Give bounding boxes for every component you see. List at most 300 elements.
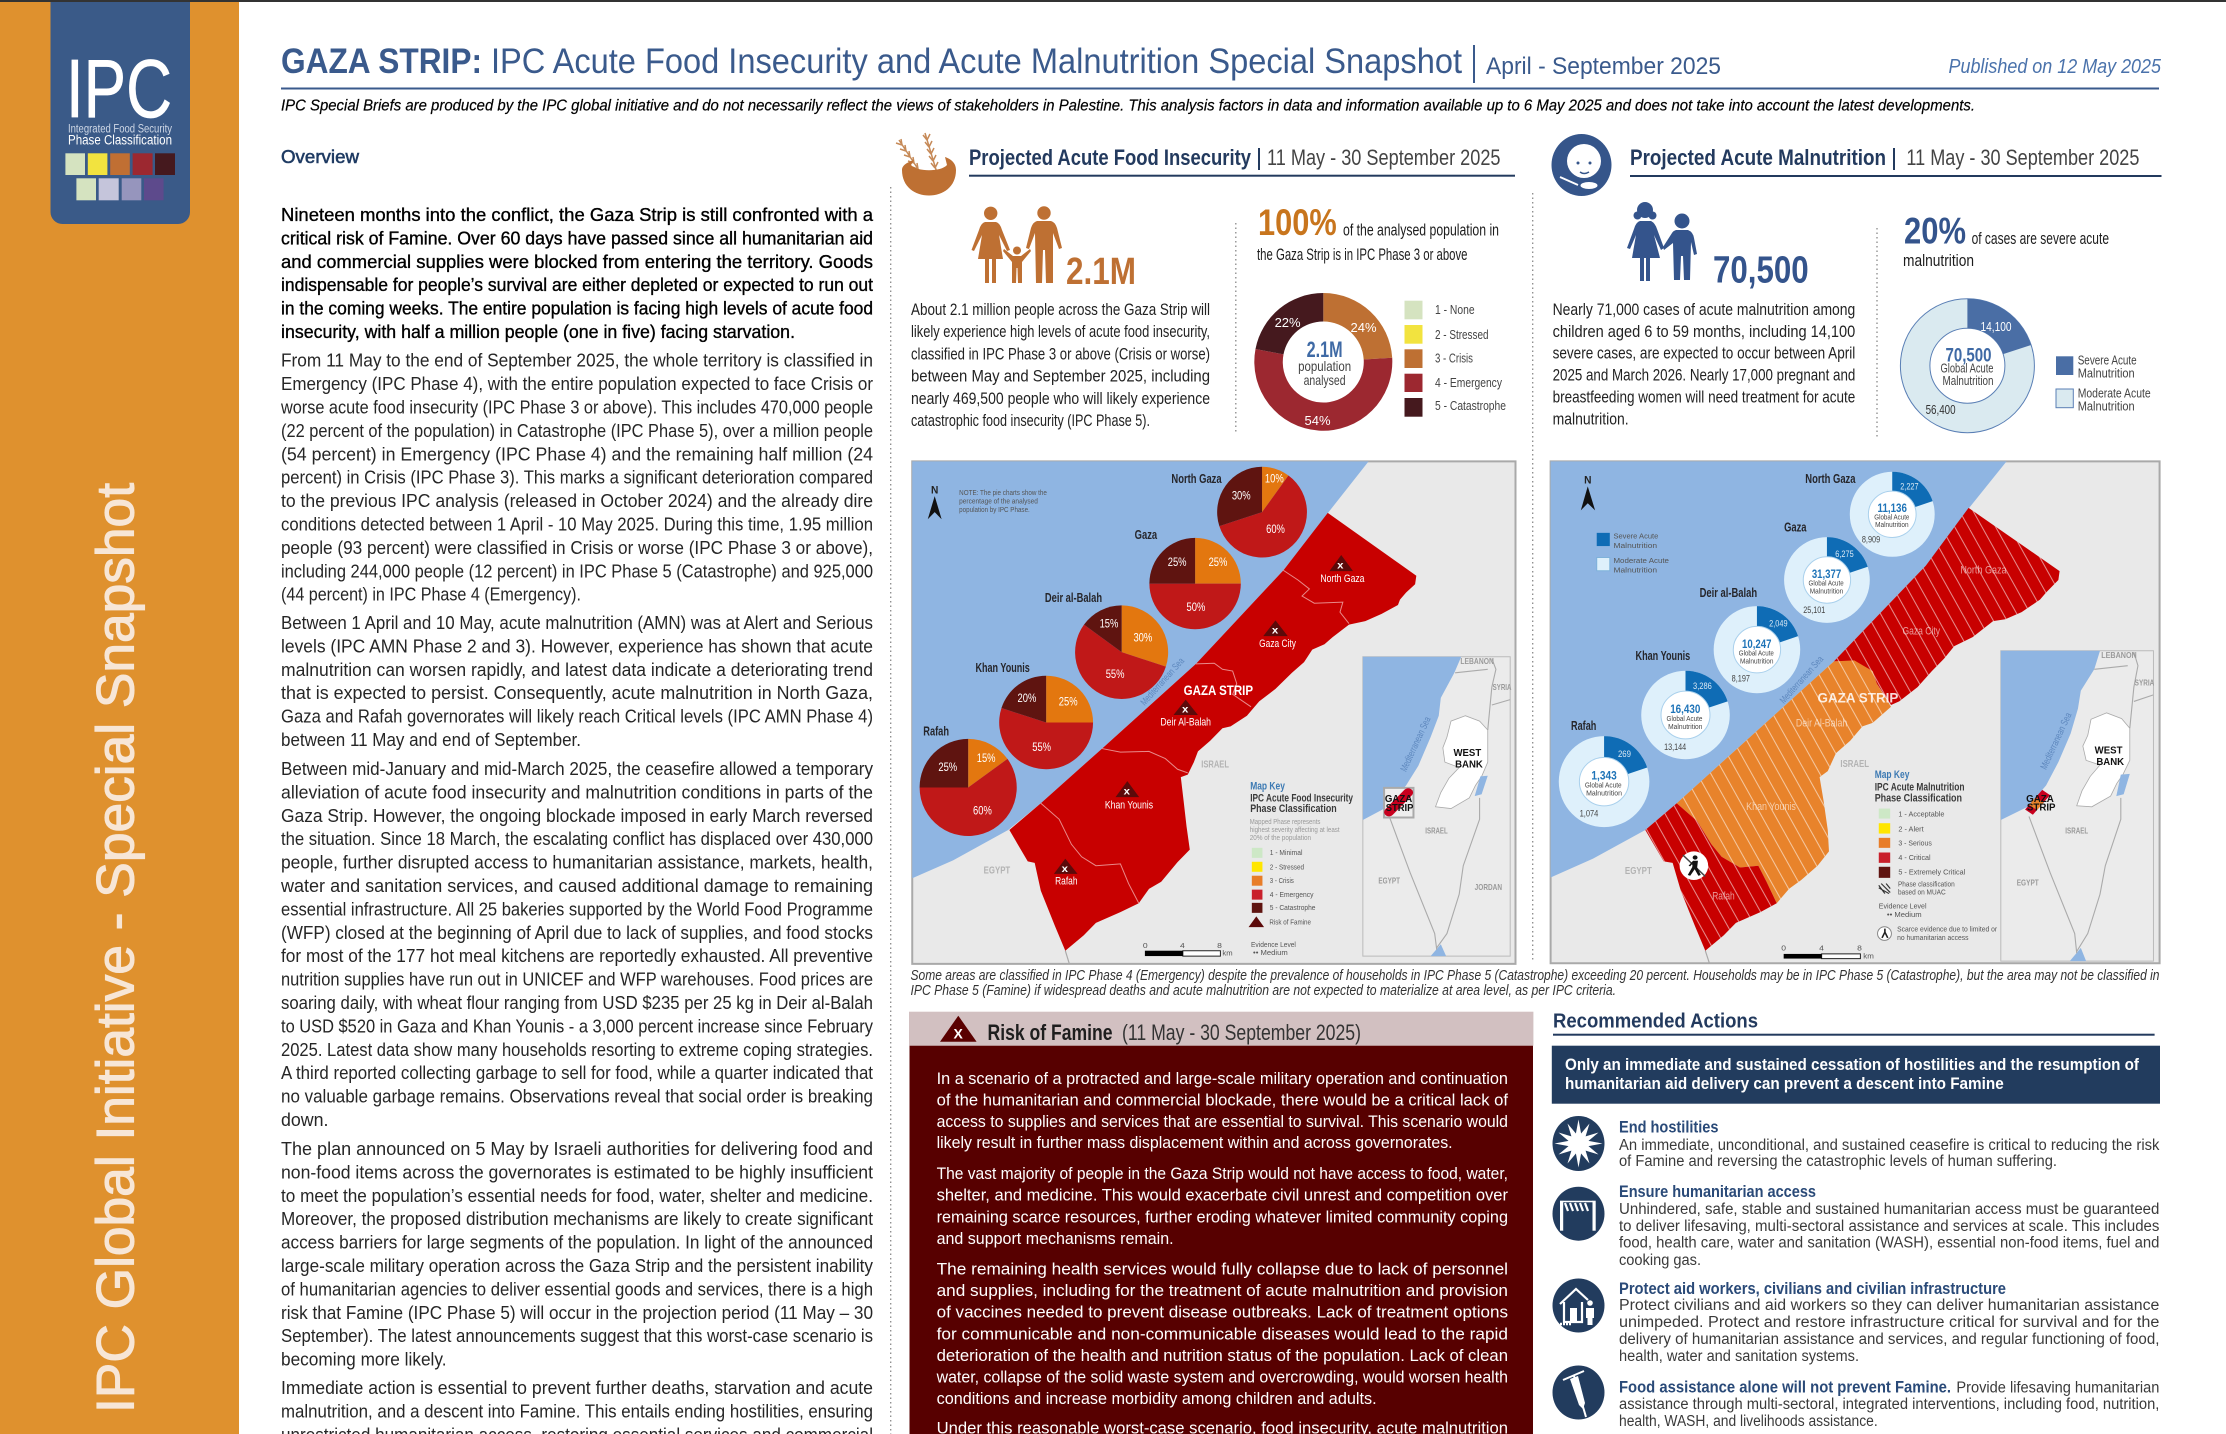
overview lead paragraph: insecurity, with half a million people (one in five) facing starvation.	[281, 322, 795, 342]
area labels: Khan Younis	[1105, 798, 1153, 811]
action: protect aid workers: delivery of humanitarian assistance and services, and regular functioning of food,	[1619, 1331, 2159, 1348]
malnutrition summary text: 2025 and March 2026. Nearly 17,000 pregnant and	[1553, 366, 1855, 384]
map key: Map Key	[1875, 770, 1910, 781]
overview paragraph: phase classification: (54 percent) in Emergency (IPC Phase 4) and the remaining half million (24	[281, 444, 873, 464]
risk of famine text: In a scenario of a protracted and large-scale military operation and continuation	[937, 1069, 1508, 1088]
overview paragraph: ceasefire and blockade: essential infrastructure. All 25 bakeries supported by the World Food Programme	[281, 899, 873, 919]
pie: north gaza: 30%	[1232, 488, 1251, 502]
action: food assistance alone: Food assistance alone will not prevent Famine.	[1619, 1377, 1951, 1396]
map key: Phase Classification	[1250, 804, 1337, 815]
pie: north gaza: 10%	[1265, 471, 1284, 485]
inset location map: GAZA	[2026, 794, 2054, 805]
scale bar: 4	[1180, 941, 1185, 950]
pie: khan younis	[976, 661, 1093, 769]
icon: woman and child	[1627, 202, 1697, 281]
area labels: Gaza City	[1902, 624, 1940, 637]
area labels: Rafah	[1055, 874, 1078, 887]
overview paragraph: ceasefire and blockade: Between mid-January and mid-March 2025, the ceasefire allowed a temporary	[281, 759, 873, 779]
overview paragraph: phase classification: (44 percent) in IPC Phase 4 (Emergency).	[281, 585, 581, 605]
inset location map: STRIP	[1386, 803, 1413, 814]
risk of famine text: for communicable and non-communicable diseases would lead to the rapid	[937, 1324, 1508, 1343]
risk of famine markers: x	[1062, 863, 1068, 875]
food insecurity summary text	[911, 300, 1210, 430]
donut: gaza: Malnutrition	[1810, 587, 1843, 595]
icon: family	[972, 206, 1062, 283]
scale bar	[1781, 944, 1874, 960]
action: ensure humanitarian access: Ensure humanitarian access	[1619, 1182, 1816, 1201]
title: April - September 2025	[1486, 53, 1721, 80]
inset location map: EGYPT	[2017, 878, 2039, 888]
pie: north gaza: 60%	[1266, 522, 1285, 536]
title: GAZA STRIP:	[281, 42, 482, 81]
overview lead paragraph	[281, 205, 874, 342]
map key: 2 - Stressed	[1270, 863, 1304, 871]
donut: deir al-balah	[1700, 586, 1800, 693]
pie: gaza: 25%	[1168, 555, 1187, 569]
pie: khan younis: 55%	[1032, 740, 1051, 754]
donut chart: food insecurity phases	[1254, 293, 1392, 431]
stat: 100% in phase 3 or above	[1257, 202, 1499, 264]
heading: recommended actions: Recommended Actions	[1553, 1011, 1758, 1033]
overview paragraph: distribution plan: becoming more likely.	[281, 1350, 446, 1370]
overview lead paragraph: in the coming weeks. The entire population is facing high levels of acute food	[281, 299, 873, 319]
overview paragraph: ceasefire and blockade	[280, 759, 873, 1130]
overview paragraph: acute malnutrition: between 11 May and end of September.	[281, 730, 581, 750]
legend: severe and moderate: Severe Acute	[1613, 532, 1659, 540]
gaza strip phase 4 area	[1009, 513, 1416, 951]
icon: syringe	[1552, 1366, 1604, 1420]
area: north gaza and gaza critical	[1834, 508, 2060, 705]
risk of famine text: conditions and increase morbidity among children and adults.	[937, 1389, 1377, 1408]
sidebar	[0, 2, 239, 1434]
food insecurity summary text: catastrophic food insecurity (IPC Phase 5).	[911, 411, 1150, 430]
pie chart note: NOTE: The pie charts show the	[959, 488, 1047, 497]
action: ensure humanitarian access: to deliver lifesaving, multi-sectoral assistance and services at scale. This includes	[1619, 1218, 2160, 1235]
donut chart: food insecurity phases: population	[1298, 358, 1351, 374]
map key: 4 - Critical	[1898, 853, 1931, 862]
area labels: ISRAEL	[1201, 759, 1229, 770]
pie: north gaza	[1171, 467, 1307, 558]
donut: north gaza: Malnutrition	[1875, 521, 1909, 529]
donut: gaza: Global Acute	[1809, 579, 1844, 588]
overview heading: Overview	[281, 147, 360, 167]
map key: 1 - Acceptable	[1898, 810, 1945, 818]
map key: Mapped Phase represents	[1250, 817, 1321, 826]
legend: severe and moderate: Moderate Acute	[1613, 556, 1669, 565]
scale bar: 8	[1857, 944, 1862, 953]
pie: north gaza: North Gaza	[1171, 472, 1222, 486]
action: ensure humanitarian access: cooking gas.	[1619, 1252, 1701, 1269]
action: food assistance alone: assistance through multi-sectoral, integrated interventions, including food, nutrition,	[1619, 1396, 2159, 1413]
map key: Phase Classification	[1875, 793, 1962, 804]
publication date: Published on 12 May 2025	[1948, 56, 2162, 78]
map caption: IPC Phase 5 (Famine) if widespread deaths and acute malnutrition are not expected to materialize at area level, as per IPC criteria.	[910, 983, 1616, 999]
action: ensure humanitarian access	[1619, 1182, 2160, 1269]
legend: severe and moderate: Malnutrition	[1613, 566, 1657, 574]
icon: wheat bowl	[896, 133, 956, 196]
donut chart: malnutrition: 56,400	[1926, 402, 1956, 417]
donut: khan younis	[1636, 649, 1730, 759]
overview paragraph: acute malnutrition: Between 1 April and 10 May, acute malnutrition (AMN) was at Alert and Serious	[281, 613, 873, 633]
map key: 2 - Alert	[1898, 825, 1924, 833]
overview paragraph: ceasefire and blockade: people, further disrupted access to humanitarian assistance, markets, health,	[281, 853, 873, 873]
disclaimer: IPC Special Briefs are produced by the IPC global initiative and do not necessarily reflect the views of stakeholders in Palestine. This analysis factors in data and information available up to 6 May 2025 and does not take into account the latest developments.	[281, 98, 1975, 114]
icon: no humanitarian access walker	[1680, 851, 1708, 880]
inset location map: SYRIA	[2135, 678, 2154, 687]
donut: north gaza: 8,909	[1862, 535, 1881, 545]
donut: gaza: 31,377	[1812, 568, 1841, 581]
overview paragraph: acute malnutrition: Gaza and Rafah governorates will likely reach Critical levels (IPC AMN Phase 4)	[281, 707, 873, 727]
malnutrition summary text	[1553, 300, 1855, 428]
north arrow: N	[931, 485, 938, 496]
donut chart: malnutrition: Malnutrition	[1942, 373, 1994, 388]
donut: gaza: 6,275	[1835, 549, 1854, 560]
legend: malnutrition: Malnutrition	[2078, 399, 2135, 414]
heading: projected acute food insecurity	[969, 145, 1515, 177]
map key	[1249, 781, 1353, 957]
action: end hostilities: of Famine and reversing the catastrophic levels of human suffering.	[1619, 1153, 2057, 1170]
legend: malnutrition	[2056, 353, 2151, 414]
donut: khan younis: 16,430	[1670, 703, 1700, 716]
map key: 5 - Catastrophe	[1270, 903, 1316, 912]
action: end hostilities: An immediate, unconditional, and sustained ceasefire is critical to reducing the risk	[1619, 1137, 2160, 1154]
donut: rafah: Malnutrition	[1586, 789, 1622, 797]
inset location map: EGYPT	[1378, 876, 1401, 885]
scale bar: km	[1222, 949, 1233, 958]
overview paragraph: immediate action	[281, 1378, 873, 1434]
overview paragraph: ceasefire and blockade: water and sanitation services, and caused additional damage to remaining	[280, 876, 873, 896]
inset location map: SYRIA	[1493, 683, 1511, 692]
pie: khan younis: 25%	[1059, 695, 1078, 709]
legend: food insecurity phases: 3 - Crisis	[1435, 351, 1473, 366]
pie: rafah: 60%	[973, 803, 992, 817]
map key: 5 - Extremely Critical	[1898, 868, 1965, 876]
donut chart: food insecurity phases: 24%	[1350, 320, 1377, 335]
area labels: EGYPT	[984, 865, 1010, 876]
inset location map: BANK	[2096, 757, 2124, 768]
risk of famine text: deterioration of the health and nutrition status of the population. Lack of clean	[937, 1346, 1508, 1365]
risk of famine markers: x	[1337, 560, 1344, 571]
donut: deir al-balah: Deir al-Balah	[1700, 586, 1757, 600]
overview lead paragraph: Nineteen months into the conflict, the Gaza Strip is still confronted with a	[281, 205, 874, 225]
area: rafah critical	[1645, 803, 1777, 951]
pie chart note: percentage of the analysed	[959, 497, 1038, 505]
area labels: GAZA STRIP	[1818, 690, 1898, 706]
pie: khan younis: Khan Younis	[976, 661, 1030, 675]
stat: 100% in phase 3 or above: the Gaza Strip is in IPC Phase 3 or above	[1257, 245, 1468, 264]
inset location map: BANK	[1455, 759, 1483, 770]
malnutrition summary text: Nearly 71,000 cases of acute malnutrition among	[1553, 300, 1855, 319]
stat: 2.1M: 2.1M	[1066, 251, 1136, 293]
inset location map: ISRAEL	[1425, 826, 1448, 835]
map key: Risk of Famine	[1269, 918, 1311, 927]
risk of famine text	[936, 1069, 1508, 1434]
map key: no humanitarian access	[1897, 933, 1969, 942]
overview paragraph: ceasefire and blockade: to USD $520 in Gaza and Khan Younis - a 3,000 percent increase since February	[281, 1016, 873, 1036]
pie: deir al-balah: Deir al-Balah	[1045, 591, 1102, 605]
scale bar: 0	[1781, 944, 1787, 953]
overview paragraph: acute malnutrition: malnutrition can worsen rapidly, and latest data indicate a deteriorating trend	[281, 660, 873, 680]
pie: gaza: 50%	[1187, 600, 1206, 614]
stat: 20% severe	[1903, 210, 2109, 270]
area labels	[984, 572, 1365, 887]
area labels: GAZA STRIP	[1184, 683, 1253, 699]
donut: north gaza: 2,227	[1900, 482, 1919, 492]
legend: food insecurity phases: 1 - None	[1435, 302, 1475, 317]
icon: child face with spoon	[1552, 134, 1612, 196]
stat: 20% severe: of cases are severe acute	[1972, 229, 2109, 248]
scale bar: 4	[1819, 944, 1825, 953]
donut: deir al-balah: 8,197	[1732, 674, 1750, 684]
legend: severe and moderate: Malnutrition	[1613, 542, 1657, 550]
pie: rafah: 15%	[977, 751, 996, 765]
pie: gaza: Gaza	[1135, 528, 1158, 542]
malnutrition summary text: children aged 6 to 59 months, including 14,100	[1553, 322, 1855, 341]
overview paragraph: phase classification: From 11 May to the end of September 2025, the whole territory is classified in	[281, 351, 873, 371]
risk of famine text: shelter, and medicine. This would exacerbate civil unrest and competition over	[937, 1186, 1508, 1205]
overview paragraph: ceasefire and blockade: no valuable garbage remains. Observations reveal that social order is breaking	[281, 1087, 873, 1107]
title: IPC Acute Food Insecurity and Acute Malnutrition Special Snapshot	[491, 42, 1462, 81]
risk of famine text: The vast majority of people in the Gaza Strip would not have access to food, water,	[937, 1164, 1508, 1183]
map key	[1875, 770, 1997, 942]
overview paragraph: ceasefire and blockade: alleviation of acute food insecurity and malnutrition conditions in parts of the	[281, 782, 873, 802]
food insecurity summary text: nearly 469,500 people who will likely experience	[911, 389, 1210, 408]
pie: rafah: 25%	[938, 760, 957, 774]
risk of famine text: water, collapse of the solid waste system and overcrowding, would worsen health	[936, 1367, 1508, 1386]
map key: •• Medium	[1887, 911, 1922, 919]
overview paragraph: distribution plan: of humanitarian agencies to deliver essential goods and services, there is a high	[281, 1279, 873, 1299]
risk of famine text: likely result in further mass displacement within and across governorates.	[937, 1133, 1453, 1152]
inset location map: LEBANON	[1460, 656, 1494, 666]
inset location map	[1363, 656, 1511, 956]
donut chart: food insecurity phases: 22%	[1275, 315, 1301, 330]
donut: khan younis: Malnutrition	[1668, 722, 1702, 731]
pie: deir al-balah	[1045, 591, 1168, 699]
north arrow	[1581, 475, 1595, 510]
stat: 100% in phase 3 or above: 100%	[1258, 202, 1337, 243]
pie: deir al-balah: 15%	[1100, 616, 1119, 630]
pie: gaza	[1135, 528, 1241, 629]
overview paragraph: distribution plan: non-food items across the governorates is estimated to be highly insufficient	[281, 1162, 873, 1182]
area labels: Mediterranean Sea	[1777, 655, 1827, 706]
area: deir al-balah and khan younis serious	[1677, 660, 1891, 903]
overview paragraph: acute malnutrition	[281, 613, 873, 750]
callout: cessation of hostilities	[1552, 1046, 2160, 1104]
map key: highest severity affecting at least	[1250, 826, 1340, 834]
pie: deir al-balah: 30%	[1133, 630, 1153, 644]
overview paragraph: distribution plan: to meet the population’s essential needs for food, water, shelter and medicine.	[281, 1186, 873, 1206]
donut: gaza: 25,101	[1803, 605, 1826, 616]
icon: famine warning triangle: X	[954, 1026, 964, 1042]
heading: projected acute malnutrition: 11 May - 30 September 2025	[1906, 145, 2139, 170]
donut: north gaza: 11,136	[1878, 502, 1907, 515]
legend: food insecurity phases: 2 - Stressed	[1435, 327, 1488, 342]
donut chart: food insecurity phases: 54%	[1304, 413, 1331, 428]
scale bar: 0	[1143, 941, 1148, 950]
inset location map: WEST	[1453, 748, 1482, 759]
donut: deir al-balah: 2,049	[1769, 619, 1788, 629]
inset location map: LEBANON	[2101, 650, 2137, 660]
overview paragraph: phase classification: Emergency (IPC Phase 4), with the entire population expected to face Crisis or	[281, 374, 873, 394]
malnutrition summary text: severe cases, are expected to occur between April	[1553, 344, 1855, 362]
icon: damaged house and person	[1552, 1278, 1604, 1332]
stat: 20% severe: malnutrition	[1903, 251, 1974, 270]
inset location map: ISRAEL	[2065, 826, 2088, 835]
overview paragraph: ceasefire and blockade: down.	[281, 1110, 328, 1130]
heading: projected acute malnutrition: Projected Acute Malnutrition	[1630, 145, 1886, 170]
overview paragraph: immediate action: malnutrition, and a descent into Famine. This entails ending hostilities, ensuring	[281, 1401, 873, 1421]
map: acute malnutrition	[1551, 461, 2160, 963]
map key: Evidence Level	[1879, 902, 1927, 910]
area labels: Deir Al-Balah	[1160, 715, 1211, 729]
pie chart note: population by IPC Phase.	[959, 506, 1030, 514]
food insecurity summary text: About 2.1 million people across the Gaza Strip will	[911, 300, 1210, 319]
map key: 4 - Emergency	[1270, 890, 1313, 899]
donut: north gaza: Global Acute	[1874, 513, 1909, 522]
donut chart: malnutrition: 14,100	[1980, 319, 2012, 334]
action: ensure humanitarian access: food, health care, water and sanitation (WASH), essential non-food items, fuel and	[1619, 1235, 2159, 1252]
donut: khan younis: 3,286	[1693, 681, 1712, 692]
donut: khan younis: 13,144	[1664, 743, 1686, 753]
action: ensure humanitarian access: Unhindered, safe, stable and sustained humanitarian access must be guaranteed	[1619, 1201, 2159, 1218]
risk of famine text: and support mechanisms remain.	[937, 1229, 1174, 1248]
area labels: Khan Younis	[1746, 800, 1796, 813]
donut chart: food insecurity phases: 2.1M	[1307, 337, 1343, 362]
area labels: Mediterranean Sea	[1138, 656, 1187, 707]
risk of famine markers: x	[1124, 786, 1130, 797]
donut: deir al-balah: Malnutrition	[1740, 657, 1773, 665]
inset location map: WEST	[2095, 745, 2123, 756]
north arrow: N	[1584, 475, 1591, 486]
icon: famine warning triangle	[940, 1016, 977, 1042]
area labels: Rafah	[1712, 889, 1735, 902]
map key: 3 - Serious	[1898, 839, 1932, 848]
action: protect aid workers: unimpeded. Protect and restore infrastructure critical for survival and for the	[1619, 1314, 2159, 1331]
overview paragraph: phase classification: to the previous IPC analysis (released in October 2024) and the already dire	[281, 491, 873, 511]
risk of famine text: access to supplies and services that are essential to survival. This scenario would	[937, 1112, 1508, 1131]
donut: gaza	[1784, 520, 1870, 623]
overview lead paragraph: critical risk of Famine. Over 60 days have passed since all humanitarian aid	[281, 228, 873, 248]
overview paragraph: distribution plan: The plan announced on 5 May by Israeli authorities for delivering food and	[281, 1139, 873, 1159]
IPC logo	[50, 2, 190, 224]
overview paragraph: phase classification: (22 percent of the population) in Catastrophe (IPC Phase 5), over a million people	[281, 421, 873, 441]
overview paragraph: acute malnutrition: levels (IPC AMN Phase 2 and 3). However, experience has shown that acute	[281, 636, 873, 656]
risk of famine heading	[988, 1020, 1361, 1045]
risk of famine text: remaining scarce resources, further eroding whatever limited community coping	[937, 1207, 1508, 1226]
overview paragraph: distribution plan: large-scale military operation across the Gaza Strip and the persistent inability	[281, 1256, 873, 1276]
risk of famine text: and supplies, including for the treatment of acute malnutrition and provision	[937, 1281, 1508, 1300]
overview paragraph: acute malnutrition: that is expected to persist. Consequently, acute malnutrition in North Gaza,	[281, 683, 873, 703]
donut: rafah: Rafah	[1571, 719, 1596, 733]
action: protect aid workers: Protect civilians and aid workers so they can deliver humanitarian assistance	[1619, 1297, 2159, 1314]
donut chart: food insecurity phases: analysed	[1304, 372, 1346, 388]
donut: north gaza: North Gaza	[1805, 472, 1856, 486]
donut: khan younis: Khan Younis	[1636, 649, 1690, 663]
overview paragraph: phase classification: conditions detected between 1 April - 10 May 2025. During this time, 1.95 million	[281, 514, 873, 534]
area labels: EGYPT	[1625, 866, 1652, 877]
IPC logo: Phase Classification	[68, 132, 172, 148]
map key: Scarce evidence due to limited or	[1897, 925, 1997, 933]
area labels: ISRAEL	[1840, 758, 1869, 770]
overview paragraph: phase classification: people (93 percent) were classified in Crisis or worse (IPC Phase 3 or above),	[281, 538, 873, 558]
overview paragraph: ceasefire and blockade: nutrition supplies have run out in UNICEF and WFP warehouses. Food prices are	[281, 970, 873, 990]
map: acute food insecurity	[912, 461, 1516, 964]
north arrow	[928, 485, 942, 519]
risk of famine text: of vaccines needed to prevent disease outbreaks. Lack of treatment options	[937, 1303, 1508, 1322]
risk of famine text: of the humanitarian and commercial blockade, there would be a critical lack of	[937, 1090, 1508, 1109]
action: end hostilities	[1619, 1118, 2160, 1170]
pie: gaza: 25%	[1209, 555, 1228, 569]
action: food assistance alone: health, WASH, and livelihoods assistance.	[1619, 1413, 1878, 1430]
donut: gaza: Gaza	[1784, 520, 1807, 534]
title	[281, 42, 1721, 83]
donut chart: malnutrition	[1900, 299, 2034, 433]
area labels: North Gaza	[1320, 572, 1365, 585]
overview paragraph: immediate action: Immediate action is essential to prevent further deaths, starvation and acute	[281, 1378, 873, 1398]
risk of famine heading: Risk of Famine	[988, 1020, 1112, 1045]
inset location map	[2001, 650, 2154, 961]
scale bar	[1143, 941, 1233, 958]
stat: 20% severe: 20%	[1904, 210, 1966, 251]
overview paragraph: ceasefire and blockade: the situation. Since 18 March, the escalating conflict has displaced over 430,000	[281, 829, 873, 849]
overview paragraph: ceasefire and blockade: A third reported collecting garbage to sell for food, while a quarter indicated that	[281, 1063, 873, 1083]
sidebar vertical title: IPC Global Initiative - Special Snapshot	[86, 483, 146, 1413]
callout: cessation of hostilities: Only an immediate and sustained cessation of hostilities and the resumption of	[1565, 1055, 2139, 1074]
callout: cessation of hostilities: humanitarian aid delivery can prevent a descent into Famine	[1565, 1074, 2004, 1093]
legend: malnutrition: Moderate Acute	[2078, 386, 2151, 401]
food insecurity summary text: likely experience high levels of acute food insecurity,	[911, 322, 1210, 341]
heading: projected acute food insecurity: 11 May - 30 September 2025	[1267, 145, 1500, 170]
area labels: North Gaza	[1960, 563, 2007, 576]
donut chart: malnutrition: Global Acute	[1940, 361, 1994, 376]
icon: road barrier	[1552, 1187, 1604, 1241]
map key: Phase classification	[1898, 880, 1955, 888]
map key: 20% of the population	[1250, 833, 1311, 842]
overview paragraph: ceasefire and blockade: 2025. Latest data show many households resorting to extreme coping strategies.	[281, 1040, 873, 1060]
map key: IPC Acute Food Insecurity	[1250, 793, 1353, 804]
pie: deir al-balah: 55%	[1106, 667, 1125, 681]
donut: rafah	[1559, 719, 1649, 827]
donut: rafah: Global Acute	[1585, 781, 1622, 789]
legend: severe and moderate	[1597, 532, 1669, 574]
risk of famine markers	[1054, 555, 1353, 875]
overview paragraph: ceasefire and blockade: for most of the 177 hot meal kitchens are reportedly exhausted. All preventive	[281, 946, 873, 966]
malnutrition summary text: breastfeeding women will need treatment for acute	[1553, 388, 1855, 406]
legend: food insecurity phases: 5 - Catastrophe	[1435, 398, 1506, 413]
risk of famine heading: (11 May - 30 September 2025)	[1122, 1020, 1361, 1045]
area labels: Deir Al-Balah	[1796, 716, 1847, 729]
donut: rafah: 1,074	[1580, 809, 1599, 819]
scale bar: 8	[1217, 941, 1222, 950]
donut: rafah: 269	[1618, 749, 1631, 760]
action: end hostilities: End hostilities	[1619, 1118, 1718, 1137]
pie: rafah: Rafah	[923, 724, 949, 738]
donut: north gaza	[1805, 472, 1935, 557]
inset location map: GAZA	[1385, 794, 1412, 805]
overview paragraph: distribution plan: Moreover, the proposed distribution mechanisms are likely to create significant	[281, 1209, 873, 1229]
overview lead paragraph: indispensable for people’s survival are either depleted or expected to run out	[281, 275, 873, 295]
action: food assistance alone: Provide lifesaving humanitarian	[1956, 1379, 2159, 1396]
legend: food insecurity phases: 4 - Emergency	[1435, 375, 1502, 390]
risk of famine markers: x	[1272, 625, 1278, 636]
legend: food insecurity phases	[1404, 301, 1506, 417]
map key: 3 - Crisis	[1270, 876, 1294, 885]
inset location map: STRIP	[2027, 802, 2056, 814]
map caption	[910, 968, 2160, 999]
overview paragraph: phase classification: percent) in Crisis (IPC Phase 3). This marks a significant deterioration compared	[281, 468, 873, 488]
pie: khan younis: 20%	[1018, 691, 1037, 705]
donut chart: malnutrition: 70,500	[1946, 346, 1992, 367]
